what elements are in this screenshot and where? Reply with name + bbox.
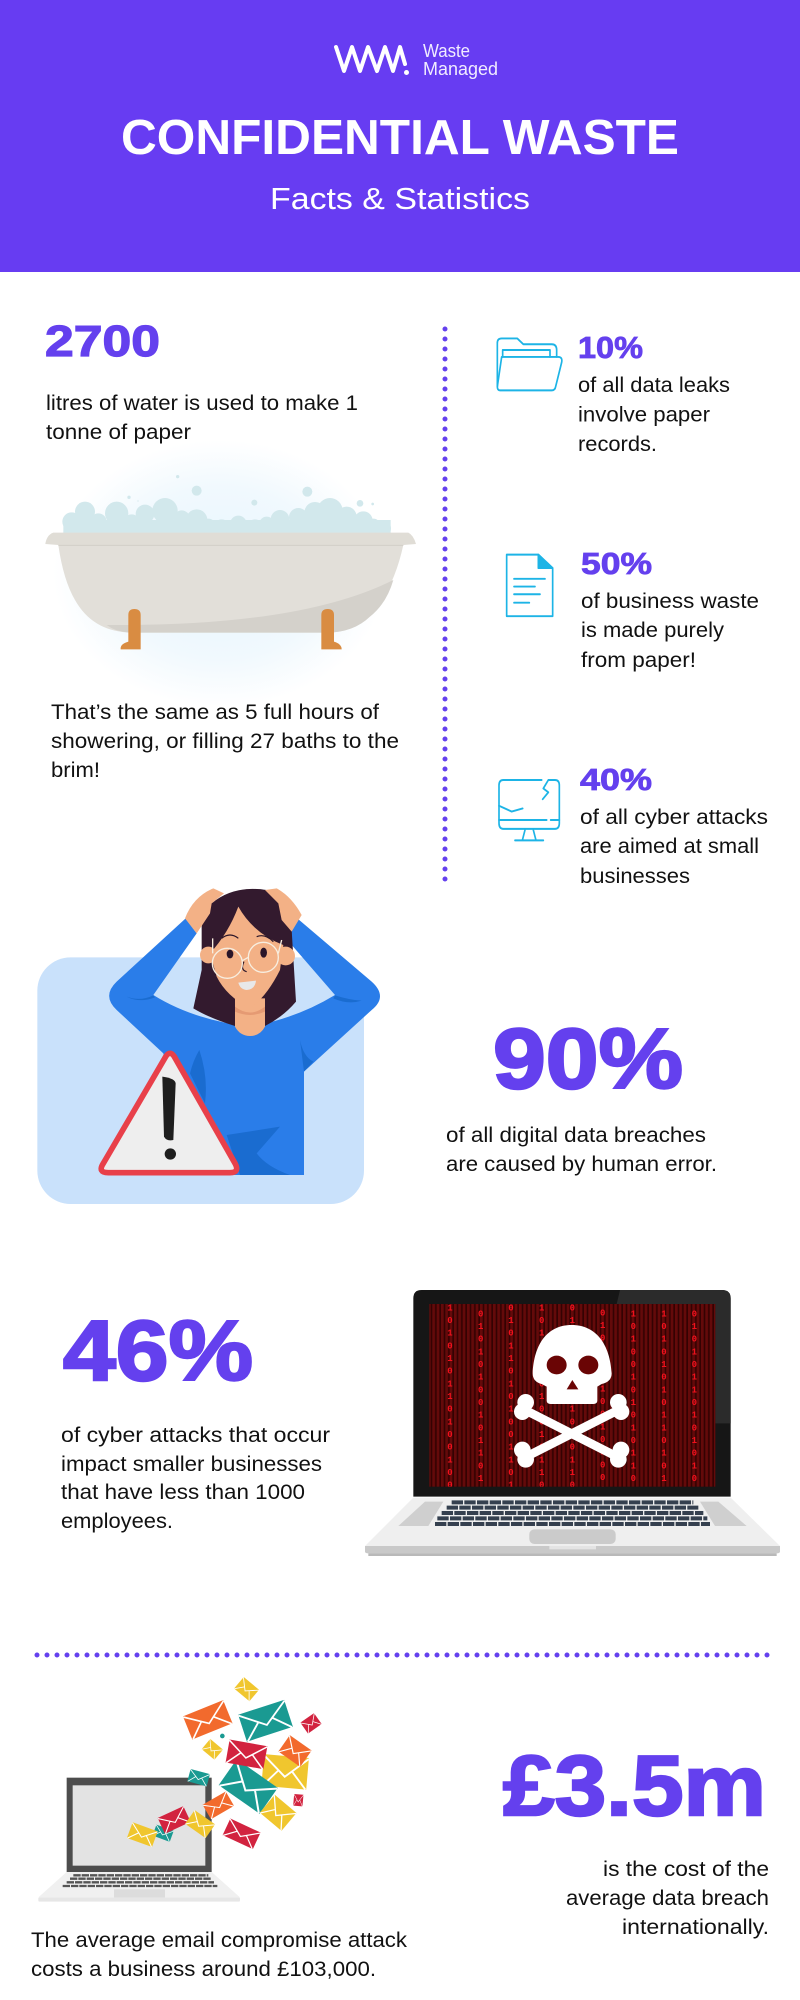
stat: 46% smaller businesses: employees. xyxy=(61,1509,173,1533)
illustration: hacked laptop with skull: 010101101010110 xyxy=(567,1303,577,1493)
stat: 46% smaller businesses: impact smaller businesses xyxy=(61,1452,322,1476)
stat: 10%: of all data leaks xyxy=(578,373,730,397)
stat: 46% smaller businesses: 46% xyxy=(63,1304,253,1399)
icon: document xyxy=(507,555,553,616)
stat: 50%: 50% xyxy=(581,546,652,581)
stat: 40%: 40% xyxy=(580,762,652,797)
stat: 46% smaller businesses: of cyber attacks that occur xyxy=(61,1423,330,1447)
stat: £3.5m average data breach: is the cost of the xyxy=(603,1857,769,1881)
logo: Waste Managed: Managed xyxy=(423,59,498,79)
stat: 90% human error xyxy=(446,1012,717,1176)
stat: 46% smaller businesses: that have less than 1000 xyxy=(61,1480,305,1504)
stat: £3.5m average data breach: average data breach xyxy=(566,1886,769,1910)
logo: Waste Managed: Waste xyxy=(423,41,470,61)
stat: £3.5m average data breach: internationally. xyxy=(622,1915,769,1939)
text: same as showering or baths: That’s the same as 5 full hours of xyxy=(51,700,379,724)
stat: 10%: involve paper xyxy=(578,402,710,426)
icon: bathtub illustration xyxy=(45,440,416,707)
warning triangle xyxy=(101,1053,237,1173)
illustration: hacked laptop with skull: 010110101001101 xyxy=(506,1303,516,1493)
stat: 50%: of business waste xyxy=(581,589,759,613)
illustration: hacked laptop with skull xyxy=(365,1290,780,1556)
text: same as showering or baths: brim! xyxy=(51,758,100,782)
illustration: stressed woman with warning sign xyxy=(37,888,380,1204)
subtitle: Facts & Statistics xyxy=(270,181,530,216)
stat: 2700 litres of water: 2700 xyxy=(45,317,160,366)
stat: 10%: 10% xyxy=(578,330,643,365)
stat: 40%: of all cyber attacks xyxy=(580,805,768,829)
illustration: laptop with flying emails xyxy=(38,1677,322,1902)
stat: 46% smaller businesses xyxy=(61,1304,330,1533)
header banner xyxy=(0,0,800,272)
illustration: hacked laptop with skull: 101011010010110 xyxy=(537,1303,547,1493)
stat: 90% human error: 90% xyxy=(493,1012,683,1107)
text: email compromise cost xyxy=(31,1928,407,1981)
title: CONFIDENTIAL WASTE xyxy=(121,111,679,165)
stat: 40%: are aimed at small xyxy=(580,834,759,858)
illustration: hacked laptop with skull: 010101001011010 xyxy=(476,1309,486,1499)
stat: 10%: records. xyxy=(578,432,657,456)
illustration: hacked laptop with skull: 010110100101001 xyxy=(598,1308,608,1498)
illustration: hacked laptop with skull: 010101101010101 xyxy=(689,1309,699,1499)
text: email compromise cost: costs a business around £103,000. xyxy=(31,1957,376,1981)
illustration: hacked laptop with skull: 101010110100100 xyxy=(445,1303,455,1493)
stat: 90% human error: are caused by human error. xyxy=(446,1152,717,1176)
stat: 40%: businesses xyxy=(580,864,690,888)
icon: cracked monitor xyxy=(499,780,559,840)
text: same as showering or baths: showering, or filling 27 baths to the xyxy=(51,729,399,753)
stat: 50%: from paper! xyxy=(581,648,696,672)
illustration: hacked laptop with skull: 101001010101100 xyxy=(628,1309,638,1499)
stat: 50%: is made purely xyxy=(581,618,724,642)
envelopes xyxy=(127,1677,322,1849)
stat: 2700 litres of water: litres of water is used to make 1 xyxy=(46,391,358,415)
stat: 90% human error: of all digital data breaches xyxy=(446,1123,706,1147)
stat: 2700 litres of water xyxy=(45,317,358,444)
illustration: hacked laptop with skull: 101010101101010 xyxy=(659,1309,669,1499)
text: same as showering or baths xyxy=(51,700,399,782)
logo: Waste Managed xyxy=(336,41,498,79)
stat: 2700 litres of water: tonne of paper xyxy=(46,420,191,444)
stat: 40% xyxy=(580,762,768,888)
stat: 10% xyxy=(578,330,730,456)
text: email compromise cost: The average email compromise attack xyxy=(31,1928,407,1952)
stat: £3.5m average data breach xyxy=(503,1739,769,1939)
foam xyxy=(62,475,391,537)
stat: 50% xyxy=(581,546,759,672)
icon: folder xyxy=(497,338,562,390)
skull and crossbones xyxy=(514,1325,629,1468)
stat: £3.5m average data breach: £3.5m xyxy=(503,1739,766,1834)
